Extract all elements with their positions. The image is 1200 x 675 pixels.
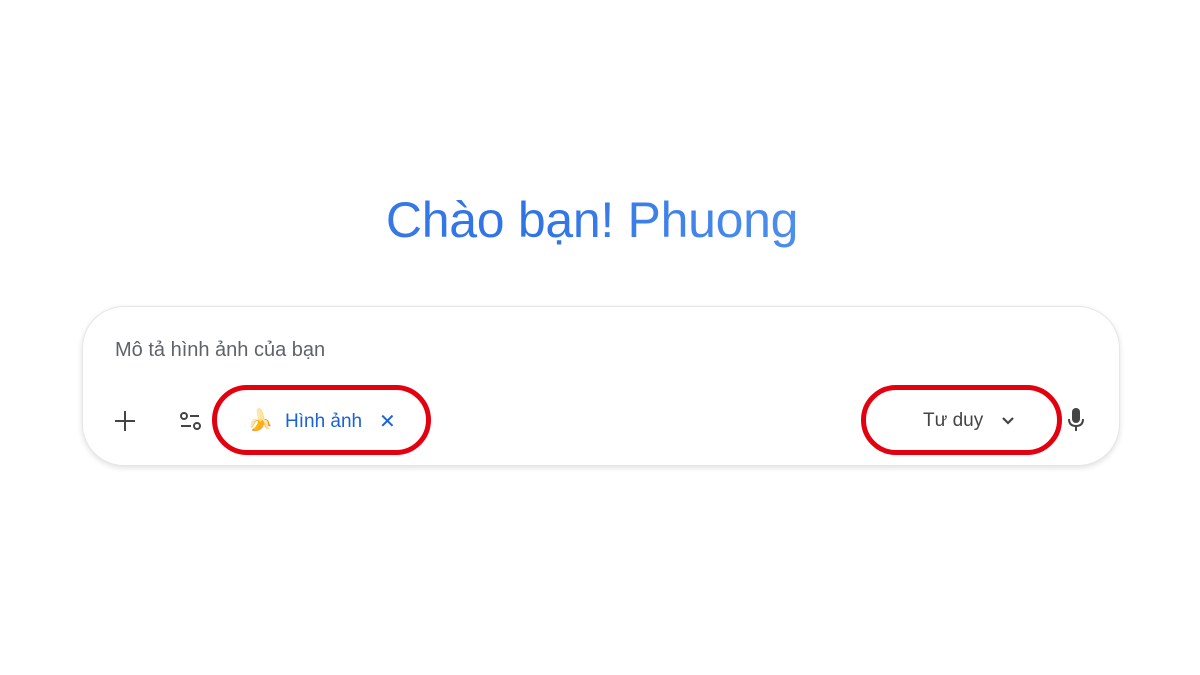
placeholder text: Mô tả hình ảnh của bạn <box>115 339 325 361</box>
chip: image mode <box>247 408 396 433</box>
chip label: Hình ảnh <box>285 411 362 432</box>
dropdown label: Tư duy <box>923 410 983 431</box>
callout: red oval around thinking dropdown <box>861 385 1062 455</box>
panel: prompt box <box>82 306 1120 466</box>
icon: chevron <box>1002 417 1014 424</box>
title <box>250 188 934 252</box>
icon: plus <box>115 411 135 431</box>
icon: banana: 🍌 <box>247 409 273 432</box>
dropdown: thinking mode <box>923 410 1014 431</box>
callout: red oval around image chip <box>212 385 431 455</box>
title: Chào bạn! Phuong <box>386 192 798 248</box>
icon: close: ✕ <box>379 411 396 433</box>
icon: tools sliders <box>180 412 201 430</box>
icon: microphone <box>1068 408 1084 431</box>
